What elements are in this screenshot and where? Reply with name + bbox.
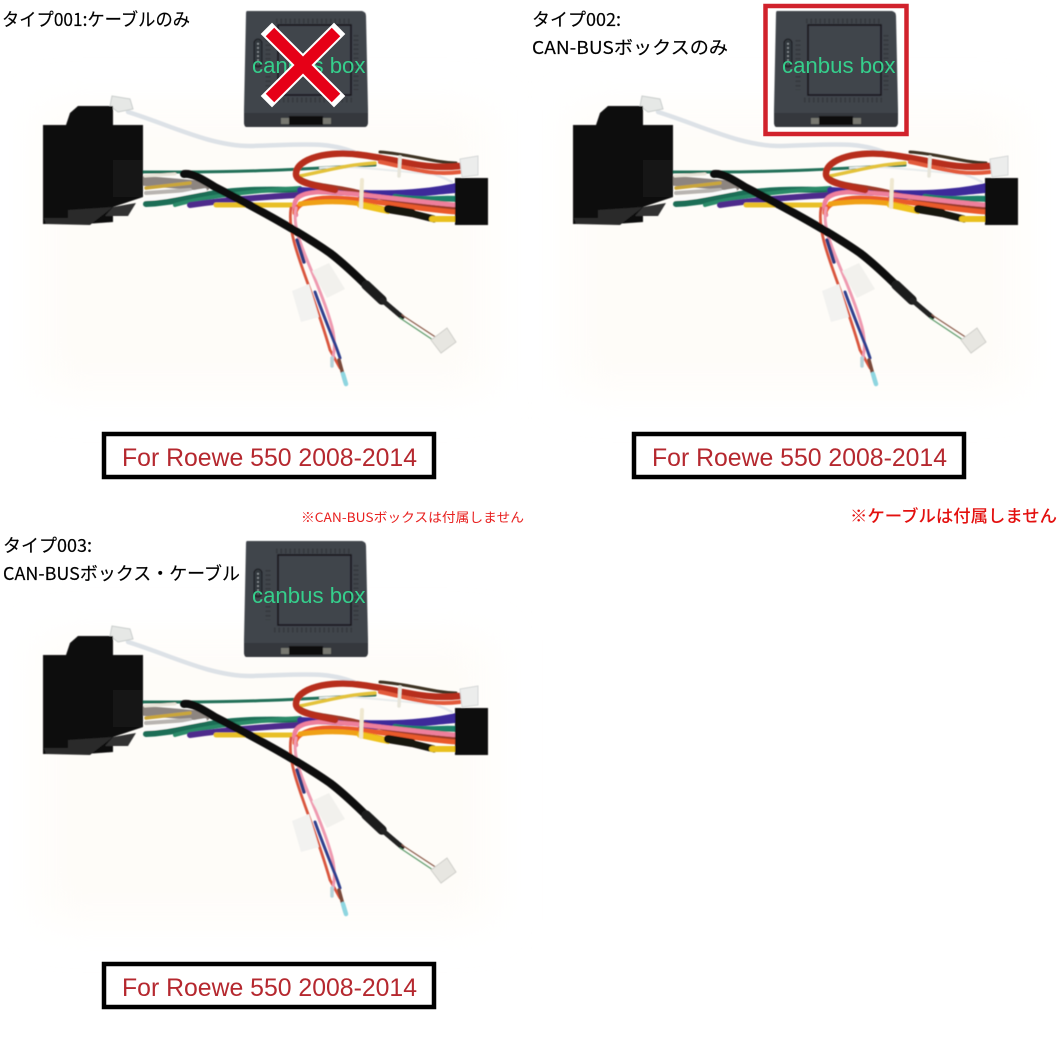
icon: red cross	[270, 32, 336, 98]
canbus box with red frame: canbus box	[782, 53, 895, 78]
heading: type 003: CAN-BUSボックス・ケーブル	[3, 560, 240, 586]
harness photo: type 002	[570, 96, 1020, 390]
vehicle label: type 003	[104, 964, 434, 1007]
canbus box	[244, 541, 368, 657]
canbus box with red frame	[766, 6, 906, 134]
vehicle label: type 002	[634, 434, 964, 477]
heading: type 003: タイプ003:	[3, 532, 92, 558]
canbus box with cross: canbus box	[252, 53, 365, 78]
vehicle label: type 002: For Roewe 550 2008-2014	[652, 445, 947, 472]
heading: type 002	[532, 6, 728, 60]
canbus box: canbus box	[252, 583, 365, 608]
harness photo: type 003	[40, 626, 490, 920]
note: cable not included: ※ケーブルは付属しません	[850, 502, 1057, 527]
panel: type 001	[2, 6, 524, 526]
canbus box with cross	[244, 11, 368, 127]
heading: type 003	[3, 532, 240, 586]
heading: type 001: タイプ001:ケーブルのみ	[2, 6, 190, 32]
vehicle label: type 001	[104, 434, 434, 477]
note: box not included: ※CAN-BUSボックスは付属しません	[301, 507, 524, 526]
heading: type 002: CAN-BUSボックスのみ	[532, 34, 728, 60]
panel: type 003	[3, 532, 490, 1007]
panel: type 002	[532, 6, 1057, 527]
vehicle label: type 003: For Roewe 550 2008-2014	[122, 975, 417, 1002]
heading: type 002: タイプ002:	[532, 6, 621, 32]
harness photo: type 001	[40, 96, 490, 390]
vehicle label: type 001: For Roewe 550 2008-2014	[122, 445, 417, 472]
